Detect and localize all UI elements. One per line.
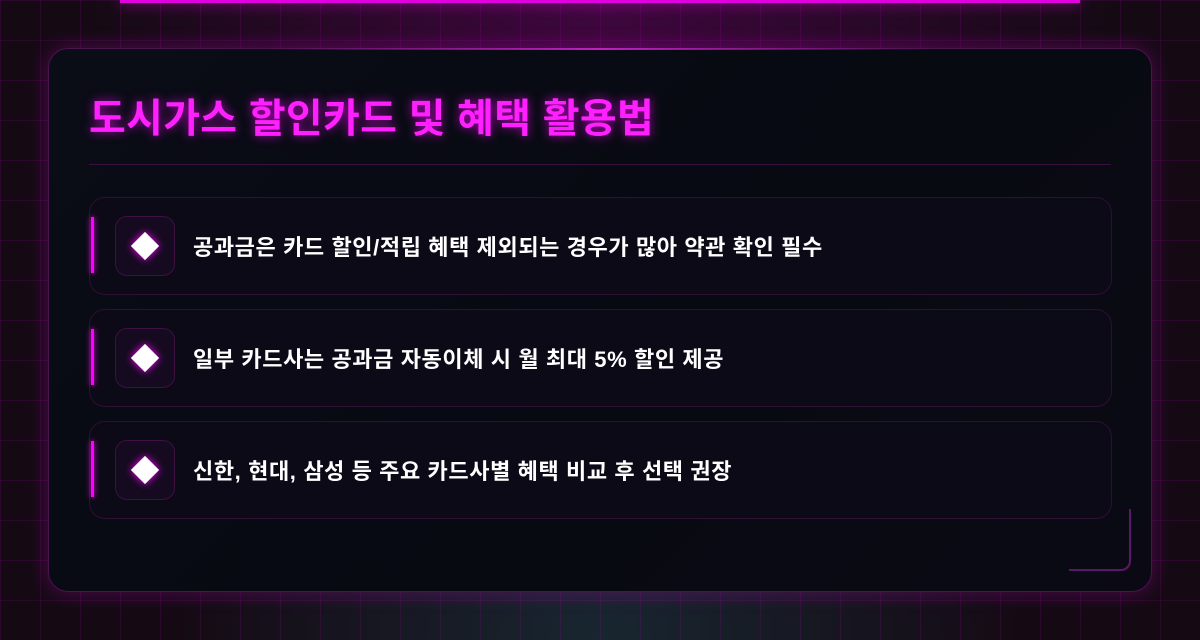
item 1 bbox=[89, 197, 1112, 295]
item 2 bbox=[89, 309, 1112, 407]
text 2: 일부 카드사는 공과금 자동이체 시 월 최대 5% 할인 제공 bbox=[193, 347, 724, 372]
icon: diamond bbox=[115, 440, 175, 500]
icon: diamond bbox=[115, 216, 175, 276]
title: 도시가스 할인카드 및 혜택 활용법 bbox=[89, 97, 654, 141]
item 3 bbox=[89, 421, 1112, 519]
panel: main card bbox=[48, 48, 1152, 592]
text 3: 신한, 현대, 삼성 등 주요 카드사별 혜택 비교 후 선택 권장 bbox=[193, 459, 732, 484]
text 1: 공과금은 카드 할인/적립 혜택 제외되는 경우가 많아 약관 확인 필수 bbox=[193, 235, 823, 260]
icon: diamond bbox=[115, 328, 175, 388]
